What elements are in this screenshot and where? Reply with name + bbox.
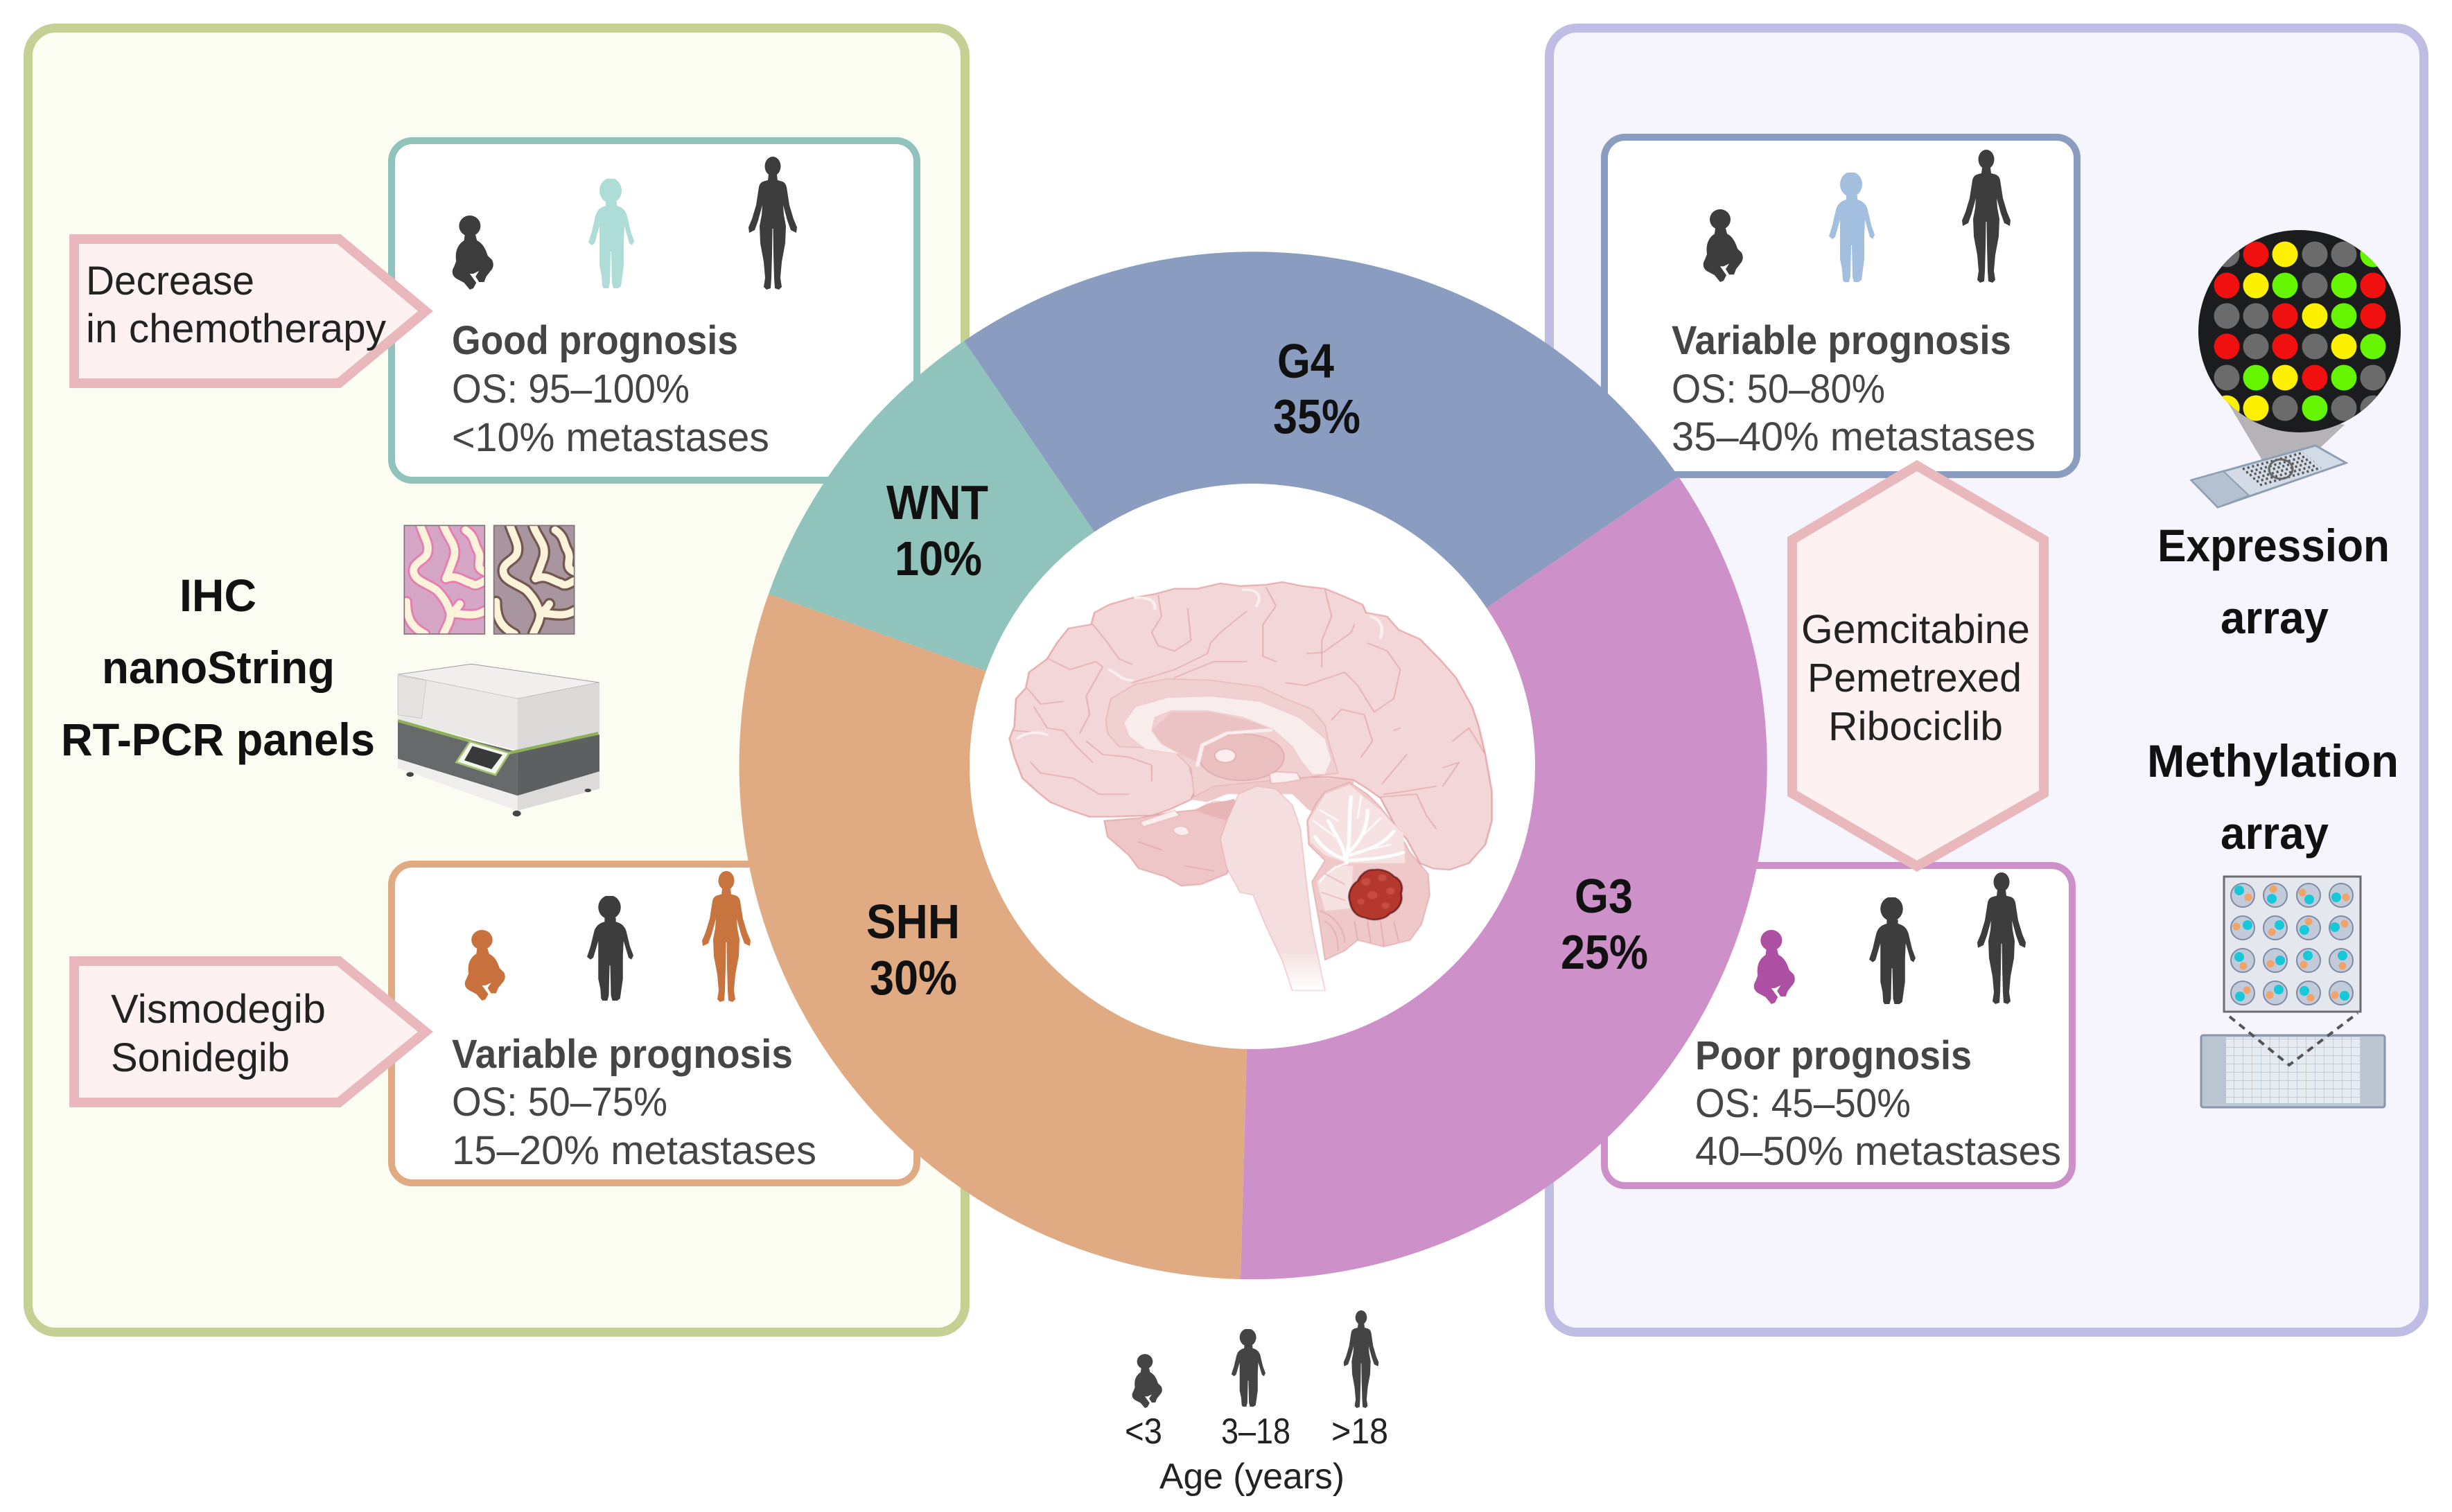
legend: age groups — [1125, 1310, 1388, 1497]
text: G3 prognosis: 40–50% metastases — [1695, 1129, 2061, 1174]
arrow: decrease in chemotherapy — [74, 239, 426, 383]
text: WNT prognosis: OS: 95–100% — [452, 367, 690, 412]
text: diagnostic methods — [61, 570, 375, 765]
text: SHH prognosis: OS: 50–75% — [452, 1080, 667, 1125]
hexagon: targeted drugs: Gemcitabine — [1801, 607, 2030, 652]
label: SHH 30%: SHH — [866, 895, 960, 949]
label: 3 to 18: 3–18 — [1221, 1412, 1290, 1452]
arrow: SHH inhibitors — [74, 961, 426, 1102]
donut chart: subgroup proportions — [739, 252, 1767, 1279]
panel: molecular profiling (right) — [1550, 28, 2424, 1332]
text: expression array: Expression — [2157, 520, 2390, 571]
icon: adult highlighted — [702, 871, 751, 1002]
label: WNT 10%: WNT — [886, 475, 988, 529]
icon: adult over 18 — [1344, 1310, 1378, 1408]
card: G3 prognosis — [1604, 865, 2072, 1186]
text: SHH prognosis — [452, 1032, 816, 1173]
card: WNT prognosis — [392, 141, 917, 480]
text: methylation array — [2147, 735, 2399, 859]
hexagon: targeted drugs — [1792, 466, 2044, 866]
label: G3 25%: 25% — [1561, 925, 1648, 979]
hexagon: targeted drugs: Pemetrexed — [1807, 656, 2022, 701]
label: G4 35% — [1273, 334, 1360, 443]
icon: infant highlighted — [465, 930, 505, 1001]
text: WNT prognosis — [452, 318, 769, 460]
text: expression array: array — [2221, 592, 2329, 643]
label: WNT 10%: 10% — [895, 531, 982, 586]
label: WNT 10% — [886, 475, 988, 586]
icon: infant under 3 — [1132, 1354, 1162, 1408]
illustration: brain with cerebellar tumour — [1010, 582, 1492, 990]
segment: WNT — [769, 341, 1254, 766]
text: G3 prognosis: Poor prognosis — [1695, 1033, 1972, 1078]
text: SHH prognosis: 15–20% metastases — [452, 1128, 816, 1173]
label: age axis: Age (years) — [1159, 1457, 1345, 1497]
text: methylation array: array — [2221, 807, 2329, 859]
text: WNT prognosis: <10% metastases — [452, 415, 769, 460]
label: SHH 30%: 30% — [870, 951, 957, 1005]
text: SHH prognosis: Variable prognosis — [452, 1032, 793, 1077]
icon: analysis instrument — [398, 664, 599, 816]
icon: child 3 to 18 — [1232, 1328, 1266, 1407]
label: under 3: <3 — [1125, 1412, 1162, 1452]
panel: clinical risk stratification (left) — [28, 28, 965, 1332]
label: G4 35%: 35% — [1273, 389, 1360, 443]
segment: SHH — [739, 594, 1254, 1279]
text: G4 prognosis: Variable prognosis — [1672, 318, 2011, 363]
label: G4 35%: G4 — [1277, 334, 1334, 388]
text: G4 prognosis: OS: 50–80% — [1672, 367, 1885, 412]
text: diagnostic methods: RT-PCR panels — [61, 714, 375, 765]
icon: child — [1869, 897, 1916, 1004]
label: G3 25% — [1561, 869, 1648, 979]
icon: expression array — [2191, 230, 2401, 507]
text: G4 prognosis: 35–40% metastases — [1672, 414, 2035, 459]
icon: infant highlighted — [1754, 930, 1795, 1004]
icon: child — [587, 895, 633, 1001]
text: G3 prognosis: OS: 45–50% — [1695, 1081, 1911, 1126]
icon: IHC tissue sections — [404, 525, 575, 634]
icon: infant — [1704, 209, 1743, 282]
icon: child highlighted — [588, 178, 634, 288]
icon: adult — [748, 157, 797, 290]
text: WNT prognosis: Good prognosis — [452, 318, 738, 363]
arrow: decrease in chemotherapy: Decrease — [86, 258, 254, 304]
icon: adult — [1962, 150, 2011, 283]
text: expression array — [2157, 520, 2390, 643]
segment: G3 — [1241, 477, 1767, 1279]
icon: methylation array — [2201, 877, 2385, 1107]
icon: child highlighted — [1829, 172, 1875, 282]
label: over 18: >18 — [1331, 1412, 1388, 1452]
segment: G4 — [964, 252, 1679, 766]
arrow: decrease in chemotherapy: in chemotherapy — [86, 306, 386, 351]
label: SHH 30% — [866, 895, 960, 1005]
text: diagnostic methods: IHC — [179, 570, 256, 621]
icon: infant — [453, 216, 493, 290]
text: methylation array: Methylation — [2147, 735, 2399, 786]
card: G4 prognosis — [1604, 137, 2077, 475]
card: SHH prognosis — [392, 864, 917, 1183]
label: G3 25%: G3 — [1575, 869, 1633, 923]
arrow: SHH inhibitors: Vismodegib — [111, 987, 326, 1032]
hexagon: targeted drugs: Ribociclib — [1828, 704, 2003, 749]
arrow: SHH inhibitors: Sonidegib — [111, 1035, 290, 1080]
text: G3 prognosis — [1695, 1033, 2061, 1174]
text: diagnostic methods: nanoString — [102, 642, 335, 693]
icon: adult — [1977, 872, 2026, 1004]
text: G4 prognosis — [1672, 318, 2035, 459]
